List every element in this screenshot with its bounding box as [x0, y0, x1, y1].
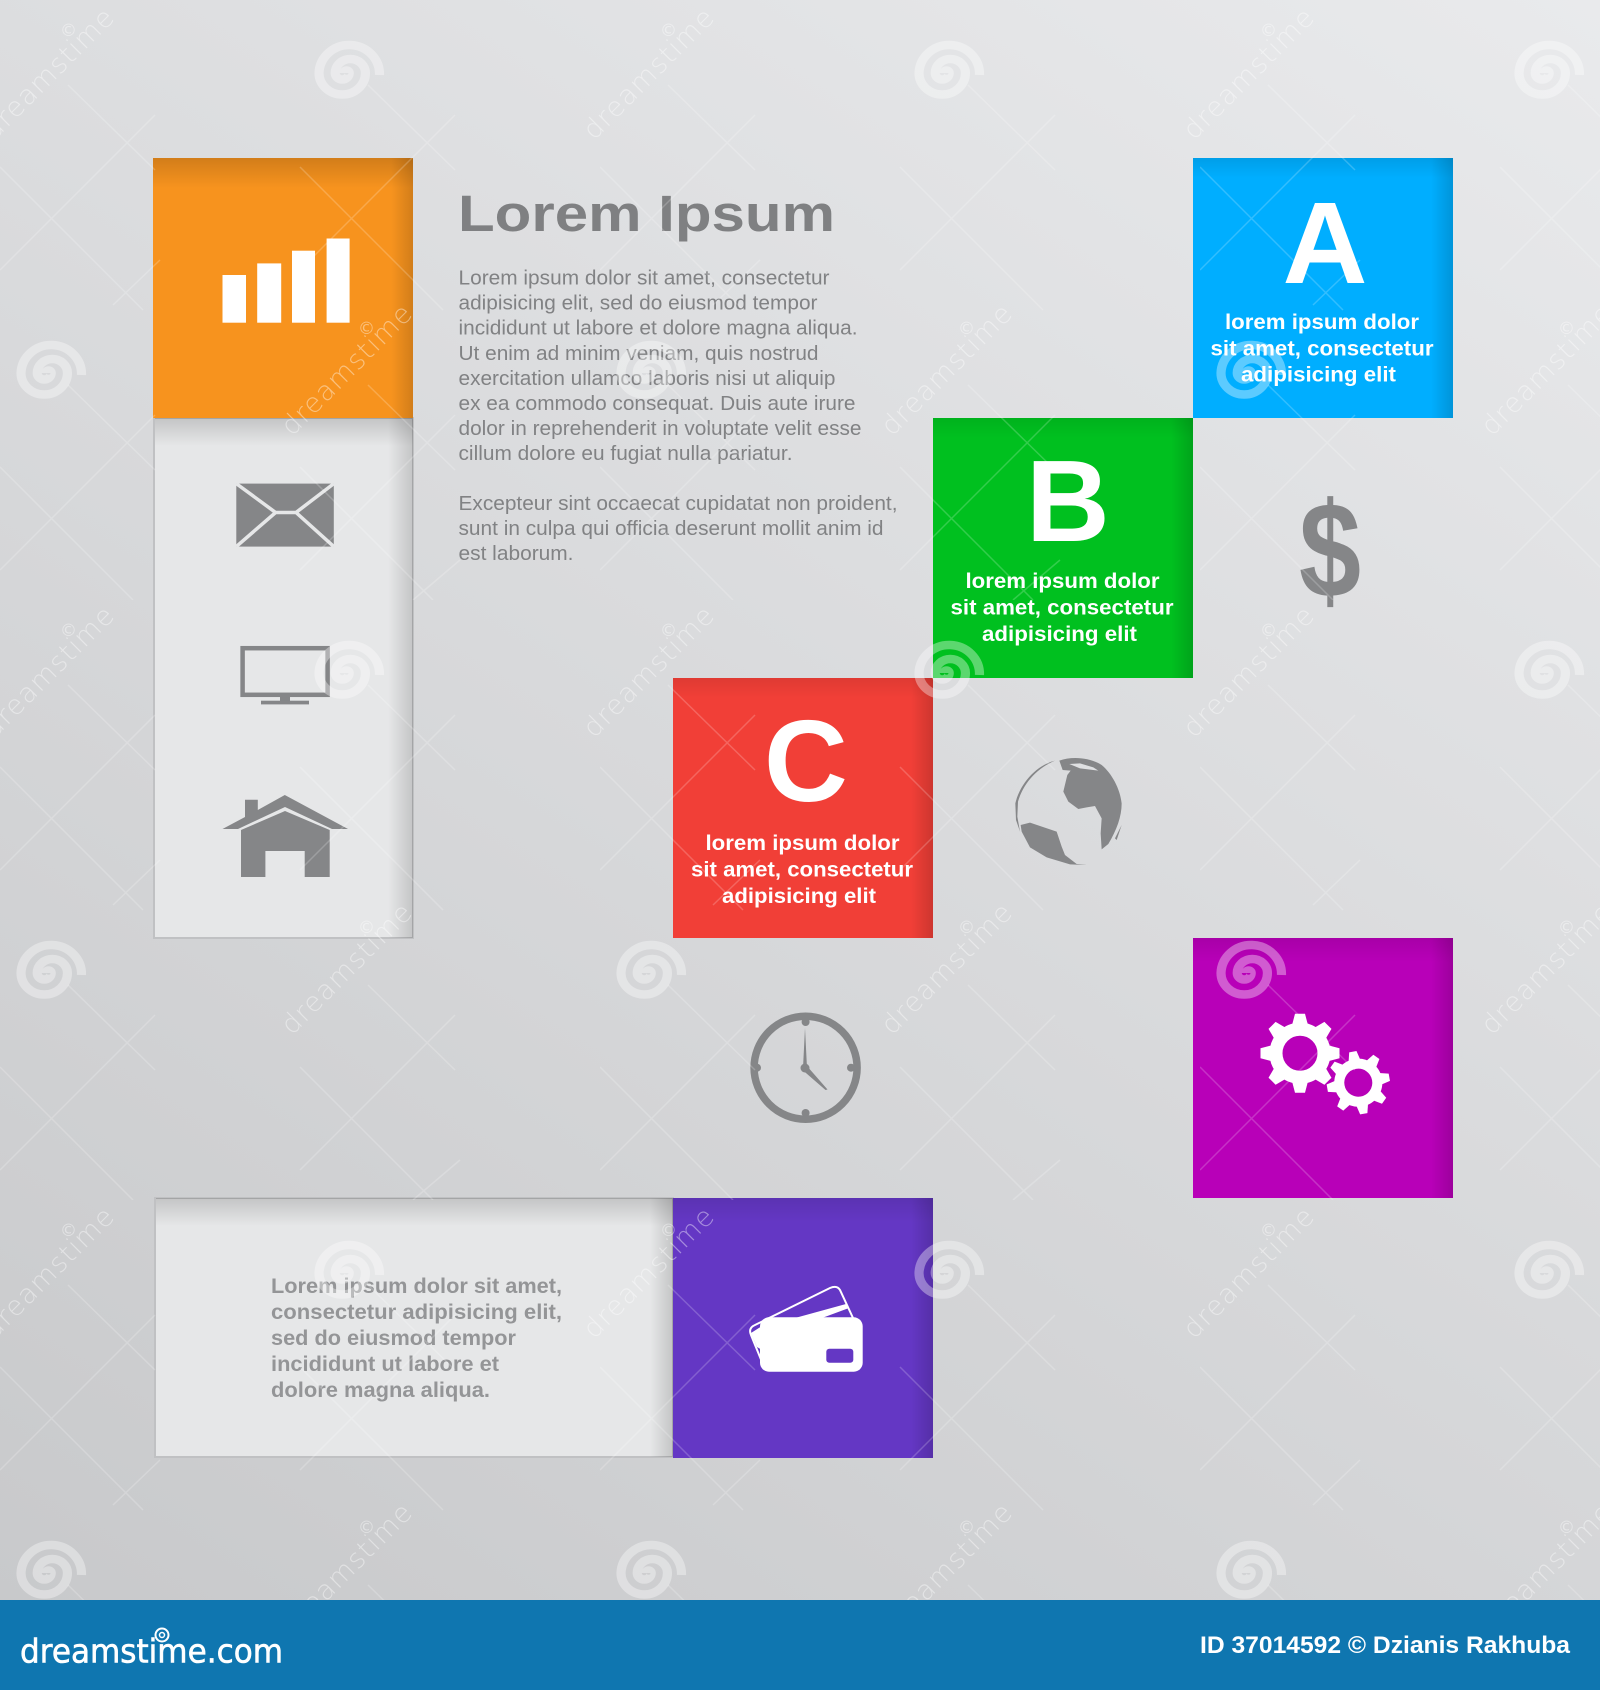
watermark overlay: dreamstime [275, 897, 419, 1041]
heading: Lorem Ipsum [458, 185, 835, 242]
icon: envelope [236, 484, 334, 547]
icon: house [222, 795, 348, 877]
icon: dollar: $ [1299, 474, 1361, 626]
tile text: C [691, 832, 913, 908]
watermark overlay: © [660, 1221, 677, 1241]
icon: clock [753, 1016, 857, 1119]
panel: bottom text [155, 1198, 673, 1457]
watermark overlay: dreamstime [1177, 600, 1321, 744]
text block: intro: Excepteur sint occaecat cupidatat non proident, [458, 493, 898, 515]
watermark overlay: © [358, 918, 375, 938]
tile text: A: adipisicing elit [1241, 364, 1396, 386]
text block: intro: sunt in culpa qui officia deserunt mollit anim id [458, 518, 884, 540]
watermark overlay: © [60, 1221, 77, 1241]
tile: B: B [1026, 436, 1110, 566]
tile text: C: lorem ipsum dolor [706, 832, 900, 855]
text block: intro: incididunt ut labore et dolore magna aliqua. [458, 318, 858, 340]
watermark overlay: © [660, 21, 677, 41]
tile: C: C [764, 696, 848, 826]
watermark overlay: dreamstime [577, 2, 721, 146]
tile: A: A [1282, 178, 1368, 308]
watermark overlay: dreamstime [1177, 2, 1321, 146]
watermark overlay: © [1260, 621, 1277, 641]
watermark overlay: dreamstime [577, 600, 721, 744]
text block: bottom panel [271, 1275, 562, 1402]
text block: bottom panel: consectetur adipisicing elit, [271, 1301, 562, 1324]
tile text: B [950, 570, 1174, 646]
tile: orange signal [153, 158, 413, 418]
tile text: C: sit amet, consectetur [691, 858, 913, 882]
text block: bottom panel: Lorem ipsum dolor sit amet, [271, 1275, 562, 1298]
text block: intro: exercitation ullamco laboris nisi ut aliquip [458, 368, 836, 390]
watermark overlay: © [358, 319, 375, 339]
text block: bottom panel: dolore magna aliqua. [271, 1379, 490, 1402]
tile text: C: adipisicing elit [722, 885, 876, 908]
watermark overlay: © [1558, 1518, 1575, 1538]
tile: C [673, 678, 933, 938]
watermark overlay: © [1260, 1221, 1277, 1241]
watermark overlay: © [60, 21, 77, 41]
footer bar [0, 1600, 1600, 1690]
icon: signal bars [222, 238, 350, 323]
watermark overlay: dreamstime [275, 298, 419, 442]
watermark overlay: © [958, 918, 975, 938]
tile text: B: lorem ipsum dolor [966, 570, 1160, 593]
watermark overlay: dreamstime [577, 1201, 721, 1345]
icon: globe [1015, 758, 1122, 865]
tile text: A [1210, 311, 1434, 386]
watermark overlay: dreamstime [1177, 1201, 1321, 1345]
watermark overlay: © [1558, 319, 1575, 339]
text block: intro: ex ea commodo consequat. Duis aute irure [458, 393, 856, 415]
text block: bottom panel: sed do eiusmod tempor [271, 1327, 516, 1350]
tile text: A: sit amet, consectetur [1210, 338, 1434, 360]
tile text: A: lorem ipsum dolor [1225, 311, 1419, 334]
icon: gears [1260, 1014, 1395, 1119]
text block: bottom panel: incididunt ut labore et [271, 1353, 499, 1376]
watermark overlay: © [958, 1518, 975, 1538]
tile: gears [1193, 938, 1453, 1198]
tile: B [933, 418, 1193, 678]
watermark overlay: dreamstime [875, 298, 1019, 442]
watermark overlay: © [1558, 918, 1575, 938]
text block: intro: adipisicing elit, sed do eiusmod tempor [458, 293, 818, 315]
watermark overlay: dreamstime [875, 897, 1019, 1041]
text block: intro: dolor in reprehenderit in voluptate velit esse [458, 418, 862, 440]
text block: intro: Lorem ipsum dolor sit amet, consectetur [458, 268, 830, 290]
tile text: B: sit amet, consectetur [950, 596, 1174, 620]
icon: monitor [243, 648, 328, 704]
panel: left icon column [154, 418, 413, 938]
watermark overlay: dreamstime [875, 1497, 1019, 1641]
text block: intro: est laborum. [458, 543, 574, 565]
footer logo: dreamstime.com [20, 1632, 283, 1670]
watermark overlay: © [60, 621, 77, 641]
watermark overlay: © [1260, 21, 1277, 41]
text block: intro [458, 268, 898, 565]
icon: credit cards [750, 1287, 863, 1372]
watermark overlay: © [358, 1518, 375, 1538]
text block: intro: cillum dolore eu fugiat nulla pariatur. [458, 443, 792, 465]
tile: credit card [673, 1198, 933, 1458]
watermark overlay: dreamstime [275, 1497, 419, 1641]
text block: intro: Ut enim ad minim veniam, quis nostrud [458, 343, 818, 365]
footer credit: ID 37014592 © Dzianis Rakhuba [1200, 1632, 1571, 1659]
tile: A [1193, 158, 1453, 418]
tile text: B: adipisicing elit [982, 623, 1137, 646]
watermark overlay: © [660, 621, 677, 641]
watermark overlay: © [958, 319, 975, 339]
